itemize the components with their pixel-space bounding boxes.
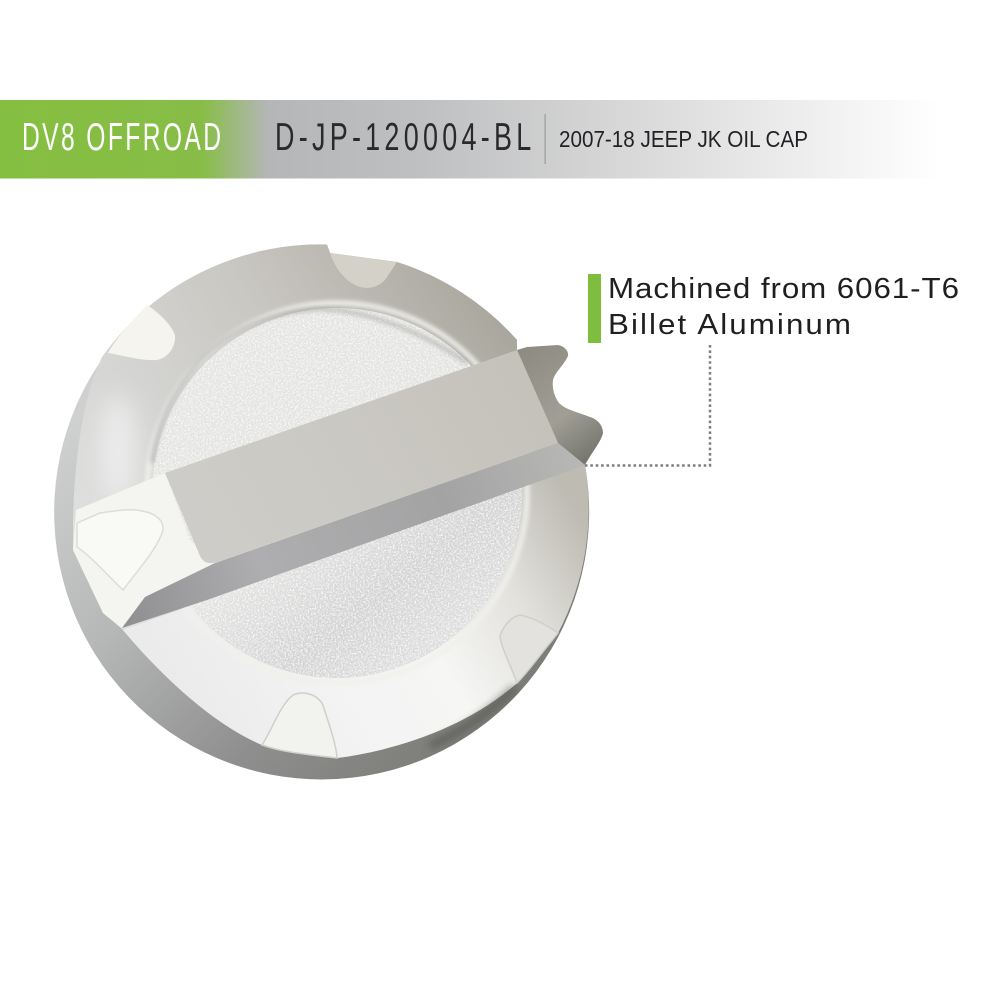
soft highlights and rim shadow bbox=[100, 395, 515, 746]
product title: 2007-18 JEEP JK OIL CAP bbox=[559, 126, 808, 152]
callout accent bar bbox=[588, 274, 601, 343]
top notch bbox=[330, 253, 397, 288]
product photo: billet aluminum oil cap bbox=[54, 244, 603, 779]
medallion groove bbox=[152, 309, 467, 463]
bottom right notch bbox=[500, 615, 558, 683]
header divider bbox=[544, 114, 546, 164]
callout text: Machined from 6061-T6 bbox=[608, 273, 959, 305]
dark machined tooth bbox=[517, 345, 603, 465]
header banner bbox=[0, 100, 940, 178]
medallion outer highlight ring bbox=[147, 303, 527, 683]
lower bright face bbox=[123, 465, 589, 758]
cap top face bbox=[73, 244, 589, 758]
left end notch bbox=[77, 510, 163, 590]
upper left notch bbox=[108, 305, 175, 360]
white left wedge bbox=[73, 473, 215, 628]
brand name: DV8 OFFROAD bbox=[22, 115, 221, 158]
textured center medallion bbox=[152, 308, 522, 678]
part number: D-JP-120004-BL bbox=[275, 116, 531, 159]
dotted leader line bbox=[585, 345, 710, 466]
callout: material bbox=[588, 273, 959, 343]
raised bar bbox=[165, 350, 558, 563]
bottom notch bbox=[262, 693, 337, 758]
cap side wall bbox=[54, 244, 589, 779]
shadow band under bar bbox=[122, 443, 585, 628]
callout: material: Billet Aluminum bbox=[608, 309, 851, 341]
